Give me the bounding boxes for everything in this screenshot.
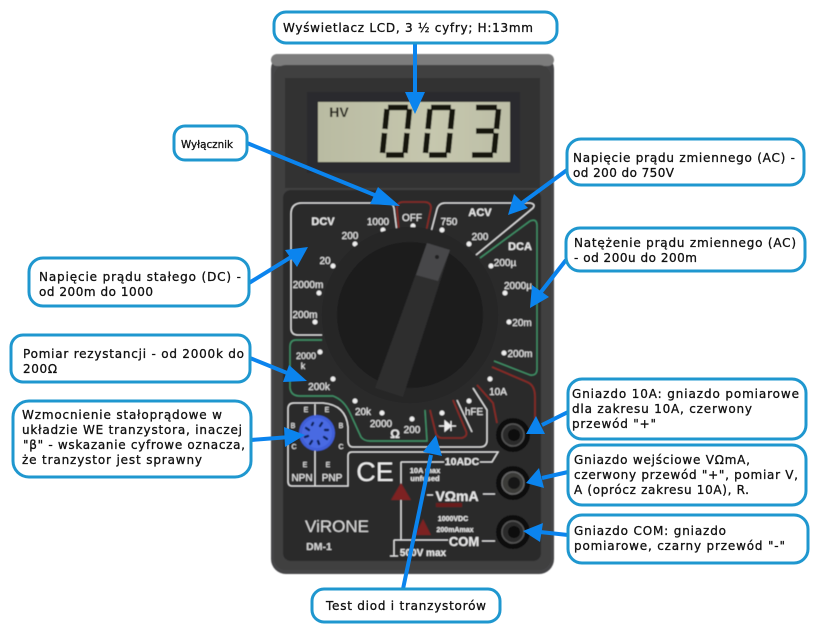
- diode range outline: [430, 400, 466, 438]
- callout: 10A jack: Gniazdo 10A: gniazdo pomiarowe: [572, 387, 799, 401]
- transistor socket labels: E: [326, 462, 331, 469]
- transistor socket labels: NPN: [291, 473, 313, 484]
- display recess: [285, 78, 540, 188]
- arrow: diode test: [403, 435, 442, 589]
- callout: AC current: [566, 228, 805, 271]
- 10A range outline: [492, 367, 535, 422]
- dial scale labels: 2000: [296, 351, 316, 361]
- callout: V ohm mA jack: czerwony przewód "+", pomiar V,: [574, 468, 798, 482]
- dial pointer handle: [375, 243, 450, 397]
- callout: transistor gain: że tranzystor jest sprawny: [22, 453, 202, 467]
- terminal wiring and labels: VΩmA: [435, 488, 479, 504]
- callout: LCD display: [274, 12, 557, 43]
- callout: AC voltage: [567, 139, 804, 185]
- terminal wiring and labels: 1000VDC: [438, 516, 468, 523]
- ACV range outline: [431, 203, 534, 255]
- terminal wiring and labels: 200mAmax: [437, 527, 474, 534]
- dial scale labels: 200: [472, 232, 489, 243]
- callout: 10A jack: dla zakresu 10A, czerwony: [572, 402, 752, 416]
- DCA range outline: [480, 220, 537, 375]
- dial scale labels: ACV: [468, 207, 492, 219]
- arrow: AC voltage: [508, 170, 567, 215]
- callout: transistor gain: [13, 401, 251, 477]
- arrow: resistance: [250, 358, 307, 382]
- callout: power switch: Wyłącznik: [181, 139, 234, 151]
- transistor socket labels: E: [325, 407, 330, 414]
- callout: DC voltage: Napięcie prądu stałego (DC) -: [39, 270, 241, 284]
- callout: V ohm mA jack: A (oprócz zakresu 10A), R.: [574, 483, 749, 497]
- dial scale labels: 200: [342, 231, 359, 242]
- transistor socket labels: [291, 407, 344, 484]
- ohm range outline: [290, 340, 427, 441]
- callout: transistor gain: układzie WE tranzystora, inaczej: [22, 423, 242, 437]
- callout: 10A jack: przewód "+": [572, 417, 656, 431]
- callout: diode test: Test diod i tranzystorów: [325, 599, 486, 613]
- dial scale labels: 200m: [507, 349, 533, 360]
- diode symbol: [439, 421, 456, 431]
- transistor socket labels: C: [338, 444, 344, 451]
- dial scale labels: 2000µ: [504, 281, 532, 292]
- terminal wiring and labels: COM: [449, 534, 479, 549]
- LCD digits 0 0 3: [382, 108, 498, 155]
- dial scale labels: 2000m: [293, 280, 323, 291]
- callout: resistance: [11, 335, 250, 382]
- dial scale labels: 200k: [308, 382, 331, 393]
- dial scale labels: 2000: [370, 419, 393, 430]
- CE mark: CE: [356, 457, 394, 487]
- dial scale labels: 200µ: [494, 258, 516, 269]
- transistor socket labels: B: [291, 423, 296, 430]
- dial scale labels: Ω: [390, 427, 400, 441]
- arrow: transistor gain: [251, 427, 305, 447]
- transistor socket labels: E: [303, 462, 308, 469]
- rotary dial: [322, 227, 498, 403]
- callout: transistor gain: Wzmocnienie stałoprądowe w: [22, 408, 222, 422]
- blue transistor socket: [299, 415, 335, 451]
- transistor socket labels: E: [304, 407, 309, 414]
- hFE range outline: [288, 388, 498, 486]
- DCV range outline: [291, 203, 397, 335]
- callout: AC current: - od 200u do 200m: [574, 251, 697, 265]
- callout: COM jack: [568, 515, 808, 563]
- arrow: LCD display: [405, 43, 425, 114]
- input jacks: [496, 418, 530, 549]
- transistor socket labels: C: [291, 444, 297, 451]
- callout: LCD display: Wyświetlacz LCD, 3 ½ cyfry; H:13mm: [283, 21, 533, 35]
- callout: resistance: Pomiar rezystancji - od 2000k do: [23, 347, 244, 361]
- callout: power switch: [174, 126, 247, 160]
- arrow: V ohm mA jack: [526, 468, 568, 488]
- arrow: AC current: [530, 260, 566, 308]
- callout: resistance: 200Ω: [23, 362, 57, 376]
- arrow: COM jack: [523, 523, 568, 542]
- callout: AC voltage: od 200 do 750V: [573, 166, 675, 180]
- dial scale labels: 750: [441, 217, 458, 228]
- terminal wiring and labels: unfused: [410, 474, 440, 483]
- callout: V ohm mA jack: Gniazdo wejściowe VΩmA,: [574, 453, 750, 467]
- dial scale labels: 10A: [489, 387, 507, 398]
- arrow: 10A jack: [526, 412, 568, 434]
- OFF range outline: [397, 202, 431, 232]
- dial scale labels: 20m: [512, 318, 532, 329]
- callout: COM jack: Gniazdo COM: gniazdo: [574, 524, 726, 538]
- dial scale labels: k: [301, 361, 306, 371]
- terminal wiring and labels: [390, 456, 495, 559]
- dial scale labels: 1000: [367, 217, 390, 228]
- dial scale labels: 200m: [292, 310, 318, 321]
- callout: AC current: Natężenie prądu zmiennego (AC): [574, 236, 796, 250]
- transistor socket labels: PNP: [322, 473, 343, 484]
- callout: DC voltage: od 200m do 1000: [39, 285, 153, 299]
- dial scale labels: DCV: [311, 216, 335, 228]
- multimeter: [271, 54, 554, 574]
- warning triangles: [391, 483, 462, 535]
- dial scale labels: 20k: [355, 407, 372, 418]
- front panel: [283, 190, 541, 561]
- dial scale labels: 20: [319, 256, 331, 267]
- brand ViRONE DM-1: [305, 517, 369, 553]
- brand ViRONE DM-1: ViRONE: [305, 517, 369, 536]
- arrow: power switch: [247, 143, 400, 206]
- arrow: DC voltage: [249, 247, 308, 283]
- dial scale labels: DCA: [508, 241, 532, 253]
- LCD screen: [318, 102, 510, 162]
- callout: 10A jack: [568, 379, 806, 439]
- meter body: [271, 54, 554, 574]
- dial scale labels: OFF: [402, 213, 422, 224]
- callout: AC voltage: Napięcie prądu zmiennego (AC) -: [573, 151, 795, 165]
- callout: diode test: [312, 589, 500, 622]
- brand ViRONE DM-1: DM-1: [306, 541, 332, 553]
- terminal wiring and labels: 10ADC: [445, 456, 480, 468]
- terminal wiring and labels: 500V max: [400, 548, 447, 559]
- transistor socket labels: B: [339, 423, 344, 430]
- dial scale labels: [292, 207, 533, 441]
- LCD HV mark: HV: [329, 104, 349, 120]
- terminal wiring and labels: 10A max: [410, 466, 441, 475]
- callout: DC voltage: [29, 258, 249, 306]
- callout: V ohm mA jack: [568, 445, 806, 505]
- dial scale labels: 200: [404, 425, 421, 436]
- dial scale labels: hFE: [465, 407, 483, 418]
- callout: COM jack: pomiarowe, czarny przewód "-": [574, 539, 785, 553]
- callout: transistor gain: "β" - wskazanie cyfrowe oznacza,: [23, 438, 245, 452]
